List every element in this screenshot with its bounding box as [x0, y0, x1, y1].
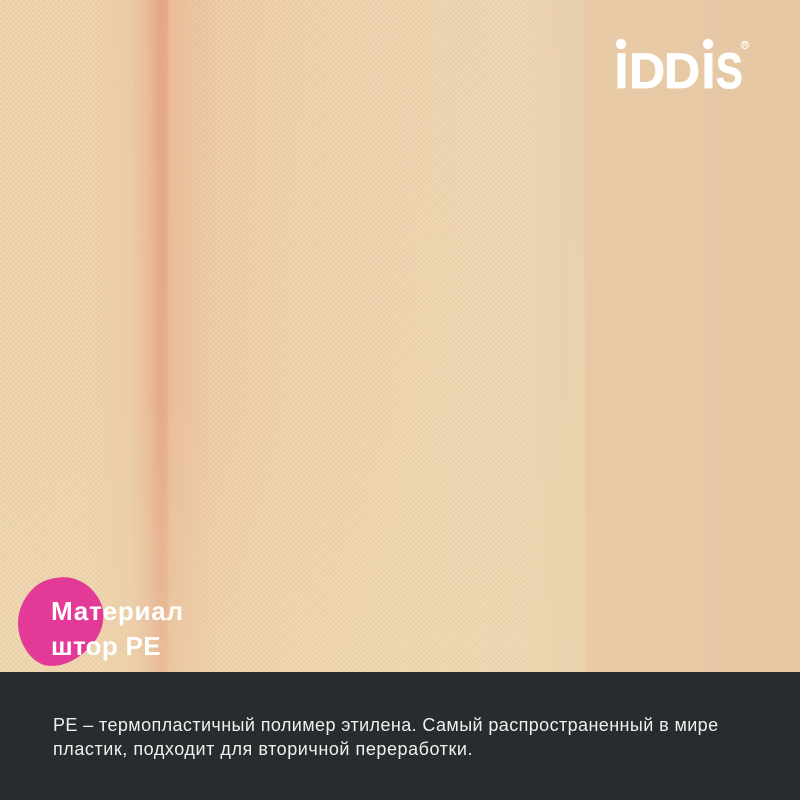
- text block: description: PE – термопластичный полимер этилена. Самый распространенный в мире: [53, 715, 718, 735]
- panel: description bar: [0, 672, 800, 800]
- logo: IDDIS: D: [664, 43, 700, 99]
- text block: description: [53, 715, 718, 759]
- icon: pink blob: [18, 577, 104, 666]
- heading: Материал: [51, 596, 184, 626]
- heading: штор PE: [51, 631, 161, 661]
- text block: description: пластик, подходит для вторичной переработки.: [53, 739, 473, 759]
- logo: IDDIS: D: [629, 43, 665, 99]
- logo: IDDIS: I: [614, 43, 628, 99]
- heading: [51, 596, 184, 661]
- logo: IDDIS: R: [743, 43, 748, 49]
- logo: IDDIS: S: [716, 43, 743, 99]
- logo: IDDIS: [614, 38, 750, 99]
- logo: IDDIS: I: [702, 43, 715, 99]
